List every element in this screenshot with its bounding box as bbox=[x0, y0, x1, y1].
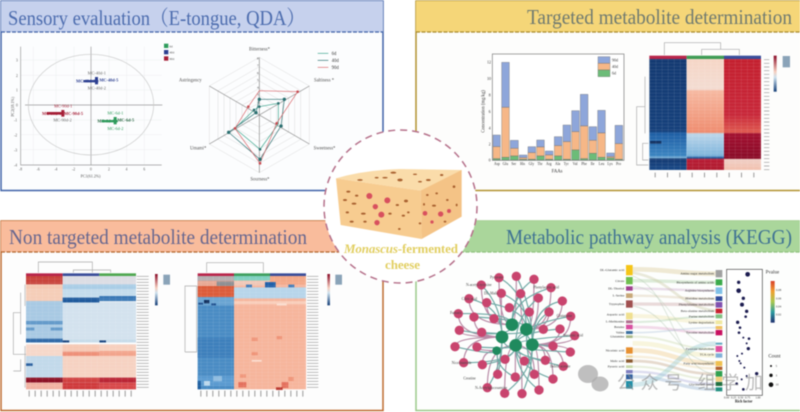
radar chart: Sourness* bbox=[250, 178, 270, 183]
stacked bar chart: FAAs: FAAs bbox=[552, 170, 563, 175]
PCA scatter chart: MC-90d-2 bbox=[53, 117, 72, 122]
radar chart: Saltiness * bbox=[314, 78, 335, 83]
stacked bar chart: FAAs: 90d bbox=[612, 57, 618, 62]
stacked bar chart: FAAs: 8 bbox=[489, 93, 491, 98]
radar chart: 2 bbox=[257, 100, 259, 104]
radar chart: Sweetness* bbox=[314, 147, 336, 152]
panel: targeted metabolite determination bbox=[416, 1, 800, 190]
stacked bar chart: FAAs: Glu bbox=[503, 162, 508, 166]
radar chart: Umami* bbox=[190, 147, 207, 152]
central circle: cheese bbox=[324, 130, 477, 283]
bubble plot: rich factor: 0.08 bbox=[776, 288, 782, 292]
PCA scatter chart: -2 bbox=[72, 168, 75, 172]
PCA scatter chart: MC-90d-4 bbox=[42, 111, 62, 116]
sankey diagram: Pyruvate metabolism bbox=[686, 347, 714, 351]
PCA scatter chart: 90d bbox=[169, 57, 175, 61]
bubble plot: rich factor: Count bbox=[768, 354, 781, 359]
stacked bar chart: FAAs: Asp bbox=[494, 162, 500, 166]
panel: sensory evaluation bbox=[1, 1, 383, 190]
bubble plot: rich factor: 3 bbox=[776, 373, 778, 377]
PCA scatter chart: 4 bbox=[126, 168, 128, 172]
network graph: Citric acid bbox=[462, 297, 477, 301]
PCA scatter chart: MC-90d-5 bbox=[64, 111, 83, 116]
sankey diagram: Pyruvic acid bbox=[608, 364, 625, 368]
stacked bar chart: FAAs: Leu bbox=[599, 162, 605, 166]
sankey diagram: Fatty acid biosynthesis bbox=[683, 362, 715, 366]
header band: non targeted bbox=[1, 221, 383, 252]
sankey diagram: Tyrosine metabolism bbox=[686, 330, 714, 334]
stacked bar chart: FAAs: Arg bbox=[546, 162, 552, 166]
radar chart: 4 bbox=[257, 85, 259, 89]
bubble plot: rich factor: 0.75 bbox=[745, 396, 751, 400]
network graph: Phenylacetic acid bbox=[533, 285, 559, 289]
panel: non targeted metabolite determination bbox=[1, 221, 383, 410]
stacked bar chart: FAAs: 4 bbox=[489, 125, 491, 130]
bubble plot: rich factor: 0.06 bbox=[776, 296, 782, 300]
sankey diagram: Beta-alanine metabolism bbox=[681, 309, 714, 313]
radar chart bbox=[179, 47, 339, 183]
header band: targeted bbox=[416, 1, 800, 32]
PCA scatter chart: 40d bbox=[169, 51, 175, 55]
PCA scatter chart: -6 bbox=[37, 168, 40, 172]
network graph: Fumaric bbox=[450, 311, 463, 315]
sankey diagram: Arginine biosynthesis bbox=[685, 289, 715, 293]
heatmap: non targeted left bbox=[13, 262, 170, 394]
network graph: N-acetyl-tyrosine bbox=[466, 283, 492, 287]
bubble plot: rich factor: 0.00 bbox=[724, 396, 730, 400]
bubble plot: rich factor: Pvalue bbox=[766, 271, 780, 276]
PCA scatter chart: MC-6d-1 bbox=[107, 110, 123, 115]
radar chart: Astringency bbox=[179, 78, 202, 83]
sankey diagram: Lysine degradation bbox=[689, 320, 714, 324]
stacked bar chart: FAAs: 2 bbox=[489, 142, 491, 147]
radar chart: 6d bbox=[332, 52, 337, 57]
heading: sensory evaluation: Sensory evaluation（E-tongue, QDA） bbox=[8, 6, 305, 30]
icon: cheese block bbox=[336, 169, 462, 239]
PCA scatter chart bbox=[10, 44, 175, 178]
network graph: Pyruvate bbox=[490, 276, 503, 280]
stacked bar chart: FAAs: Ala bbox=[555, 162, 561, 166]
network graph: Creatine bbox=[463, 376, 476, 380]
header band: KEGG bbox=[416, 221, 800, 252]
stacked bar chart: FAAs: Gly bbox=[529, 162, 534, 166]
radar chart: 40d bbox=[332, 59, 339, 64]
PCA scatter chart: 2 bbox=[108, 168, 110, 172]
PCA scatter chart: -8 bbox=[19, 168, 22, 172]
sankey diagram: DL-Threitol bbox=[608, 286, 624, 290]
network graph: Glutamine bbox=[557, 314, 572, 318]
network graph: Succinic acid bbox=[563, 334, 583, 338]
PCA scatter chart: MC-40d-2 bbox=[88, 85, 106, 90]
stacked bar chart: FAAs: Ile bbox=[591, 162, 595, 166]
PCA scatter chart: 6 bbox=[143, 168, 145, 172]
sankey diagram: Aspartic acid bbox=[607, 312, 625, 316]
radar chart: 3 bbox=[257, 93, 259, 97]
sankey diagram: Betaine bbox=[614, 325, 625, 329]
sankey diagram: Purine metabolism bbox=[689, 314, 714, 318]
PCA scatter chart: -2 bbox=[14, 133, 17, 137]
bubble plot: rich factor: 1.00 bbox=[755, 396, 761, 400]
PCA scatter chart: MC-40d-1 bbox=[88, 70, 106, 75]
sankey diagram: L-Serine bbox=[613, 293, 625, 297]
stacked bar chart: FAAs: 0 bbox=[489, 158, 491, 163]
PCA scatter chart: MC-6d-5 bbox=[117, 117, 134, 122]
PCA scatter chart: 6d bbox=[169, 44, 173, 48]
sankey diagram: DL-Glutamic acid bbox=[600, 268, 625, 272]
sankey diagram: L-Methionine bbox=[606, 320, 625, 324]
watermark bbox=[578, 365, 763, 395]
PCA scatter chart: MC-90d-1 bbox=[54, 104, 72, 109]
stacked bar chart: FAAs: 40d bbox=[612, 64, 618, 69]
heatmap: non targeted right bbox=[185, 263, 342, 394]
sankey diagram: Glutamine bbox=[610, 335, 625, 339]
PCA scatter chart: 2 bbox=[16, 74, 18, 78]
radar chart: 6 bbox=[257, 71, 259, 75]
network graph: DL-Malic bbox=[484, 292, 499, 296]
radar chart: 8 bbox=[257, 56, 259, 60]
stacked bar chart: FAAs bbox=[482, 54, 624, 175]
panel: metabolic pathway analysis bbox=[416, 221, 800, 410]
sankey diagram: Citrate bbox=[615, 279, 625, 283]
stacked bar chart: FAAs: Thr bbox=[537, 162, 543, 166]
central circle: cheese: cheese bbox=[385, 257, 420, 272]
PCA scatter chart: -1 bbox=[14, 119, 17, 123]
PCA scatter chart: -4 bbox=[54, 168, 58, 172]
radar chart: 7 bbox=[257, 64, 259, 68]
network graph bbox=[450, 272, 583, 398]
sankey diagram: Histidine metabolism bbox=[685, 297, 714, 301]
PCA scatter chart: 0 bbox=[90, 168, 92, 172]
stacked bar chart: FAAs: Lys bbox=[607, 162, 613, 166]
bubble plot: rich factor: 0.02 bbox=[776, 312, 782, 316]
PCA scatter chart: 1 bbox=[16, 89, 18, 93]
stacked bar chart: FAAs: Pro bbox=[616, 162, 621, 166]
stacked bar chart: FAAs: 6 bbox=[489, 109, 491, 114]
radar chart: Bitterness* bbox=[249, 47, 271, 52]
PCA scatter chart: -3 bbox=[14, 148, 17, 152]
PCA scatter chart: MC-6d-2 bbox=[107, 126, 123, 131]
sankey diagram: Phenylalanine metabolism bbox=[679, 303, 714, 307]
PCA scatter chart: MC-40d-5 bbox=[99, 78, 118, 83]
PCA scatter chart: PC2(18.1%) bbox=[10, 96, 15, 117]
PCA scatter chart: 0 bbox=[16, 104, 18, 108]
bubble plot: rich factor: 0.04 bbox=[776, 304, 782, 308]
sankey diagram: Tryptophan bbox=[609, 302, 625, 306]
sankey diagram: Amino sugar metabolism bbox=[680, 272, 714, 276]
stacked bar chart: FAAs: Concentration (mg/kg) bbox=[482, 90, 487, 133]
heatmap: targeted metabolites bbox=[637, 43, 790, 175]
PCA scatter chart: PC1(61.2%) bbox=[81, 173, 101, 178]
bubble plot: rich factor: 5 bbox=[776, 364, 778, 368]
label: Monascus-fermented cheese: Monascus-fermented bbox=[343, 241, 459, 256]
sankey diagram: Nicotinic acid bbox=[606, 348, 625, 352]
PCA scatter chart: MC-40d-4 bbox=[76, 79, 96, 84]
sankey diagram: Malic acid bbox=[610, 359, 625, 363]
PCA scatter chart: -4 bbox=[14, 163, 17, 167]
radar chart: 5 bbox=[257, 78, 259, 82]
stacked bar chart: FAAs: 12 bbox=[487, 60, 491, 65]
watermark: 公众号 组学加 bbox=[617, 369, 763, 395]
stacked bar chart: FAAs: Ser bbox=[511, 162, 517, 166]
bubble plot: rich factor: Rich factor bbox=[735, 399, 753, 403]
network graph: Nicotinamide bbox=[452, 361, 472, 365]
PCA scatter chart: MC-6d-4 bbox=[97, 118, 115, 123]
sankey diagram: TCA cycle bbox=[700, 352, 715, 356]
network graph: Indole acetate bbox=[550, 365, 571, 369]
bubble plot: rich factor: 0.25 bbox=[731, 396, 737, 400]
stacked bar chart: FAAs: Val bbox=[573, 162, 578, 166]
sankey diagram: Biosynthesis of amino acids bbox=[677, 280, 715, 284]
heading: non targeted: Non targeted metabolite determination bbox=[9, 225, 307, 249]
stacked bar chart: FAAs: Tyr bbox=[564, 162, 569, 166]
sankey diagram: Glycine and serine bbox=[689, 382, 715, 386]
sankey diagram: Valine bbox=[616, 330, 625, 334]
stacked bar chart: FAAs: His bbox=[520, 162, 526, 166]
header band: sensory evaluation bbox=[1, 1, 383, 32]
bubble plot: rich factor bbox=[724, 269, 782, 403]
PCA scatter chart: 3 bbox=[16, 59, 18, 63]
sankey diagram bbox=[600, 265, 722, 391]
bubble plot: rich factor: 0.50 bbox=[738, 396, 744, 400]
bubble plot: rich factor: 10 bbox=[776, 383, 779, 387]
network graph: N-Acetylglucosamine bbox=[475, 386, 507, 390]
stacked bar chart: FAAs: 10 bbox=[487, 76, 491, 81]
stacked bar chart: FAAs: Phe bbox=[581, 162, 587, 166]
radar chart: 90d bbox=[332, 66, 339, 71]
stacked bar chart: FAAs: 6d bbox=[612, 71, 616, 76]
